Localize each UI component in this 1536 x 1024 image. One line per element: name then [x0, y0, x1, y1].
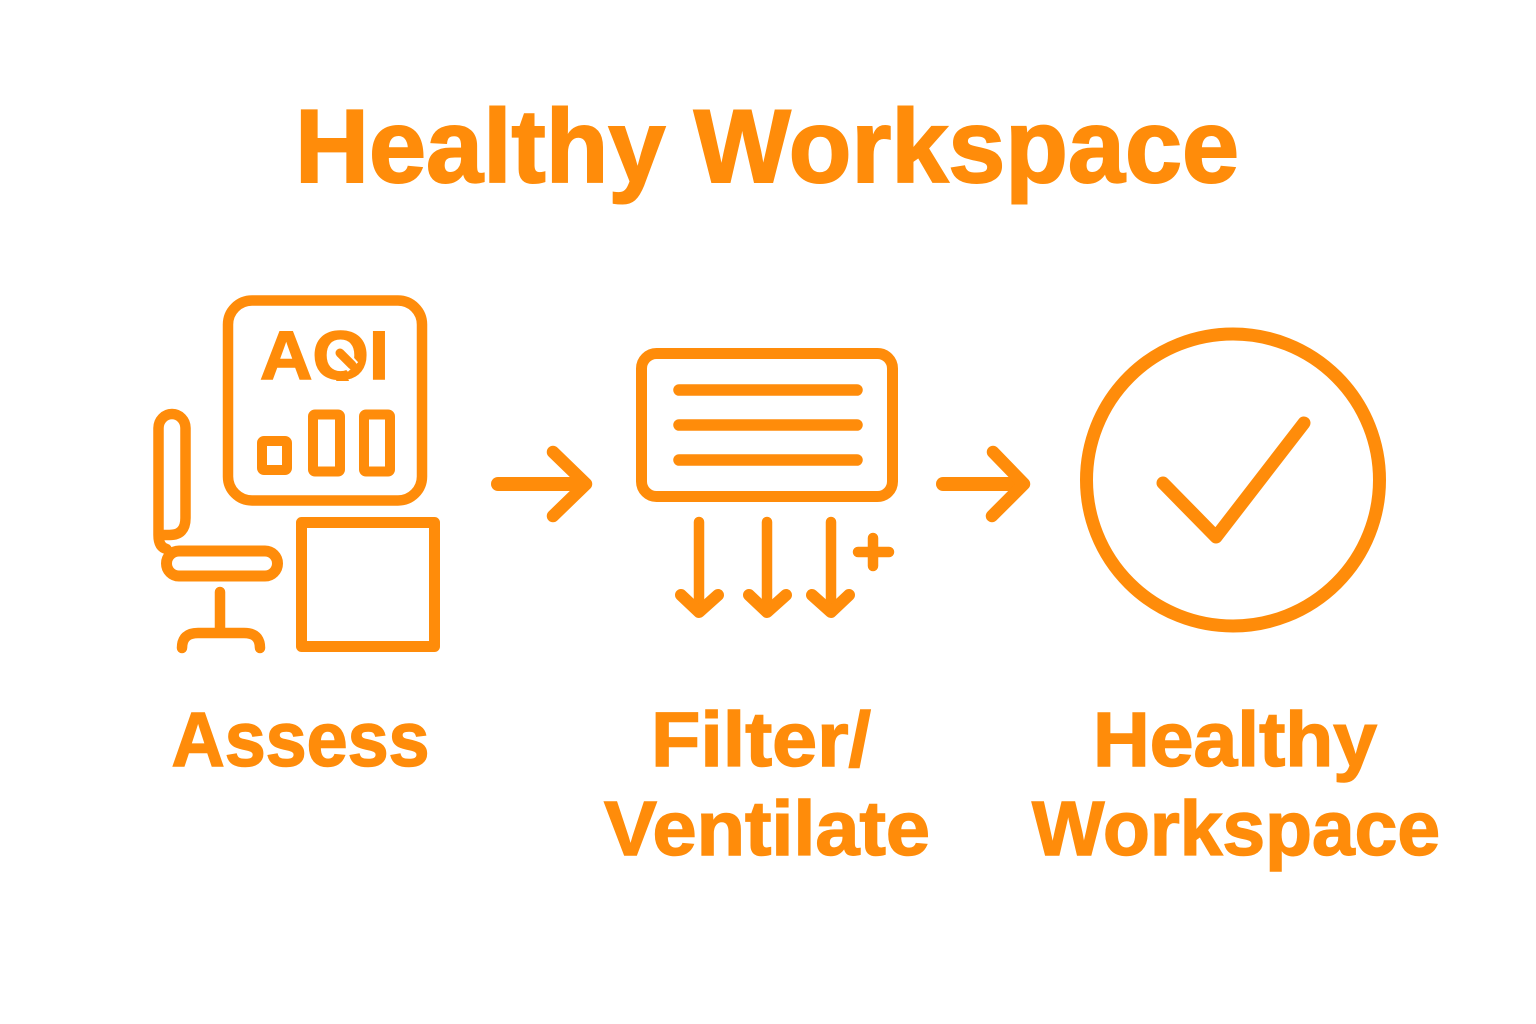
arrow: filter to healthy workspace — [943, 452, 1024, 516]
label: healthy workspace: Workspace — [1032, 786, 1440, 872]
airflow arrows — [699, 522, 831, 608]
label: filter/ventilate: Filter/ — [651, 697, 871, 783]
chair stem and base — [182, 592, 260, 648]
AQI label — [260, 330, 385, 381]
label: healthy workspace: Healthy — [1093, 697, 1377, 783]
label: healthy workspace — [1032, 697, 1440, 872]
arrow: assess to filter — [498, 452, 586, 516]
AQI bars — [262, 414, 390, 472]
circle — [1086, 334, 1380, 626]
AQI label: AQI — [260, 317, 389, 394]
label: filter/ventilate — [604, 697, 930, 872]
chair back — [158, 414, 186, 549]
label: filter/ventilate: Ventilate — [604, 786, 930, 872]
desk box — [302, 522, 434, 646]
icon: filter and ventilate unit — [642, 354, 892, 612]
checkmark — [1163, 423, 1304, 537]
filter lines — [679, 390, 857, 460]
plus sign — [858, 538, 889, 566]
title: Healthy Workspace — [295, 89, 1239, 205]
chair seat — [166, 551, 278, 576]
icon: checkmark in circle — [1086, 334, 1380, 626]
icon: assess workstation with AQI monitor — [158, 300, 434, 648]
label: assess: Assess — [172, 697, 430, 783]
monitor screen — [228, 300, 422, 500]
filter unit body — [642, 354, 892, 496]
